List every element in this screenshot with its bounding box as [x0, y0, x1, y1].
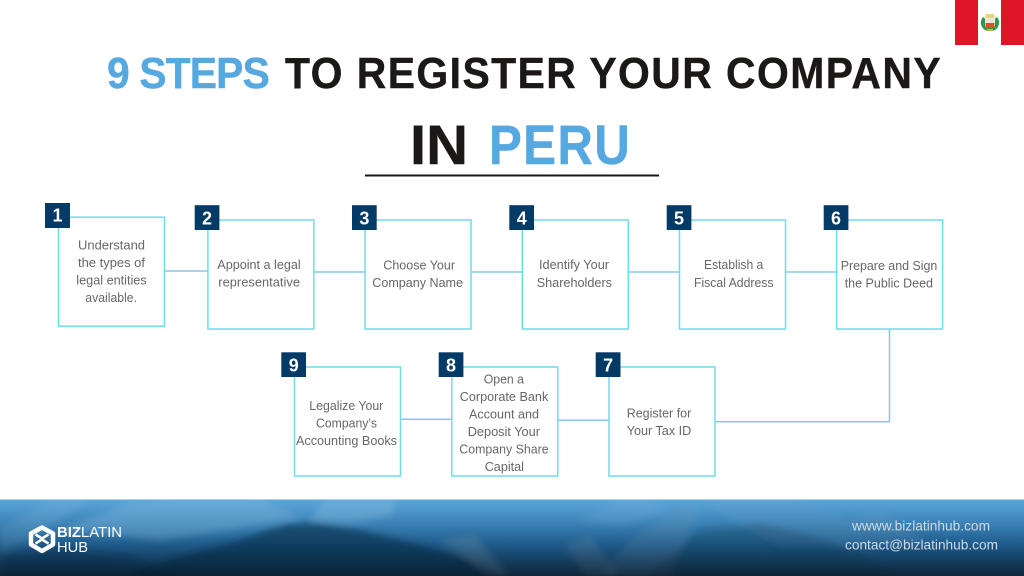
step 1: the types of [78, 255, 145, 270]
step 8: Corporate Bank [460, 389, 549, 404]
step 9 [281, 352, 400, 476]
icon: logo mark [31, 528, 53, 551]
step 6: the Public Deed [845, 276, 933, 290]
step 9: Accounting Books [296, 433, 397, 448]
step 9: 9 [289, 355, 299, 375]
step 8: Company Share [459, 442, 549, 457]
step 4: Identify Your [539, 257, 610, 272]
step 4 [509, 205, 628, 329]
step 8 [439, 352, 558, 476]
step 3: Company Name [372, 275, 463, 290]
logo: HUB [57, 540, 88, 556]
step 8: Capital [485, 459, 524, 474]
step 4: Shareholders [537, 275, 612, 290]
step 1: legal entities [76, 273, 147, 288]
step 8: Account and [469, 406, 539, 422]
step 6: Prepare and Sign [841, 258, 937, 273]
title line 1: 9 STEPS [107, 50, 270, 98]
contact details [845, 518, 998, 552]
flag of Peru [955, 0, 1024, 45]
step 3: Choose Your [383, 257, 456, 272]
title line 1: TO REGISTER YOUR COMPANY [285, 50, 941, 98]
step 2: 2 [202, 208, 212, 228]
connector lines [164, 271, 890, 422]
step 4: 4 [517, 208, 527, 228]
step 7: Register for [627, 405, 692, 420]
step 1: 1 [52, 206, 63, 226]
icon: coat of arms [981, 14, 999, 31]
step 1: Understand [78, 238, 145, 252]
step 1 [45, 203, 164, 326]
step 2: Appoint a legal [217, 257, 301, 272]
title underline [365, 174, 659, 176]
dark ridge [152, 519, 476, 574]
step 5: Establish a [704, 257, 764, 272]
step 2: representative [218, 275, 300, 290]
step 9: Legalize Your [309, 398, 384, 413]
step 7: Your Tax ID [627, 423, 691, 438]
step 7 [596, 352, 715, 476]
contact details: wwww.bizlatinhub.com [851, 518, 990, 534]
step 5: Fiscal Address [694, 275, 774, 290]
step 3 [352, 205, 471, 329]
title line 2: PERU [489, 114, 630, 177]
step 8: Deposit Your [468, 424, 541, 439]
title line 2 [410, 113, 630, 177]
mountain texture [0, 500, 930, 576]
step 3: 3 [359, 208, 369, 228]
step 5 [667, 205, 786, 329]
contact details: contact@bizlatinhub.com [845, 536, 998, 552]
step 6: 6 [831, 208, 841, 228]
step 9: Company’s [316, 415, 377, 430]
logo: BIZLATIN [57, 525, 122, 541]
logo [31, 525, 122, 556]
step 7: 7 [603, 355, 613, 375]
title line 2: IN [410, 113, 468, 176]
step 2 [195, 205, 314, 329]
step 6 [824, 205, 943, 329]
footer band [0, 500, 1024, 576]
step 1: available. [85, 290, 137, 305]
step 5: 5 [674, 208, 684, 228]
step 8: 8 [446, 355, 456, 375]
step 8: Open a [484, 371, 525, 386]
